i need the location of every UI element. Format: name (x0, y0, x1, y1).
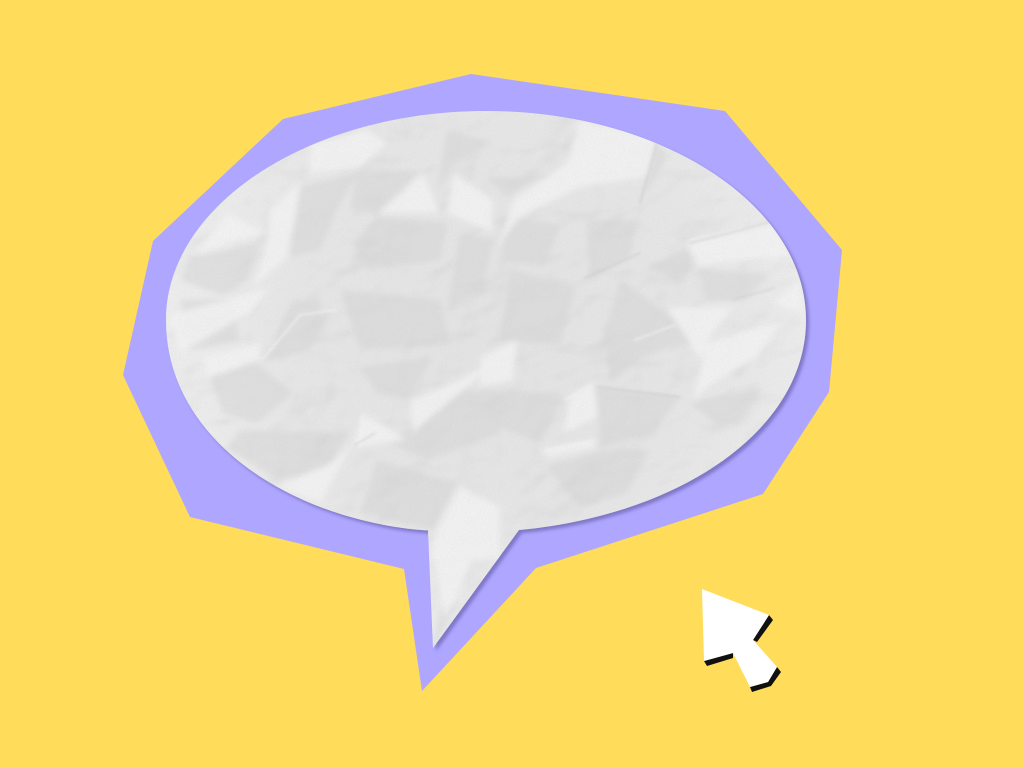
light crease lines (266, 310, 674, 354)
dark crease lines (355, 143, 775, 445)
icon: mouse cursor (702, 589, 781, 692)
paper creases (160, 105, 815, 655)
crumpled paper speech bubble (160, 105, 815, 655)
cursor white body (702, 589, 777, 687)
paper base shape (166, 111, 806, 648)
crumple lighting (326, 146, 739, 520)
purple bubble backing (123, 74, 842, 691)
cursor black edges (704, 615, 781, 692)
paper grain (160, 105, 815, 655)
illustration: speech bubble and cursor (123, 74, 842, 692)
